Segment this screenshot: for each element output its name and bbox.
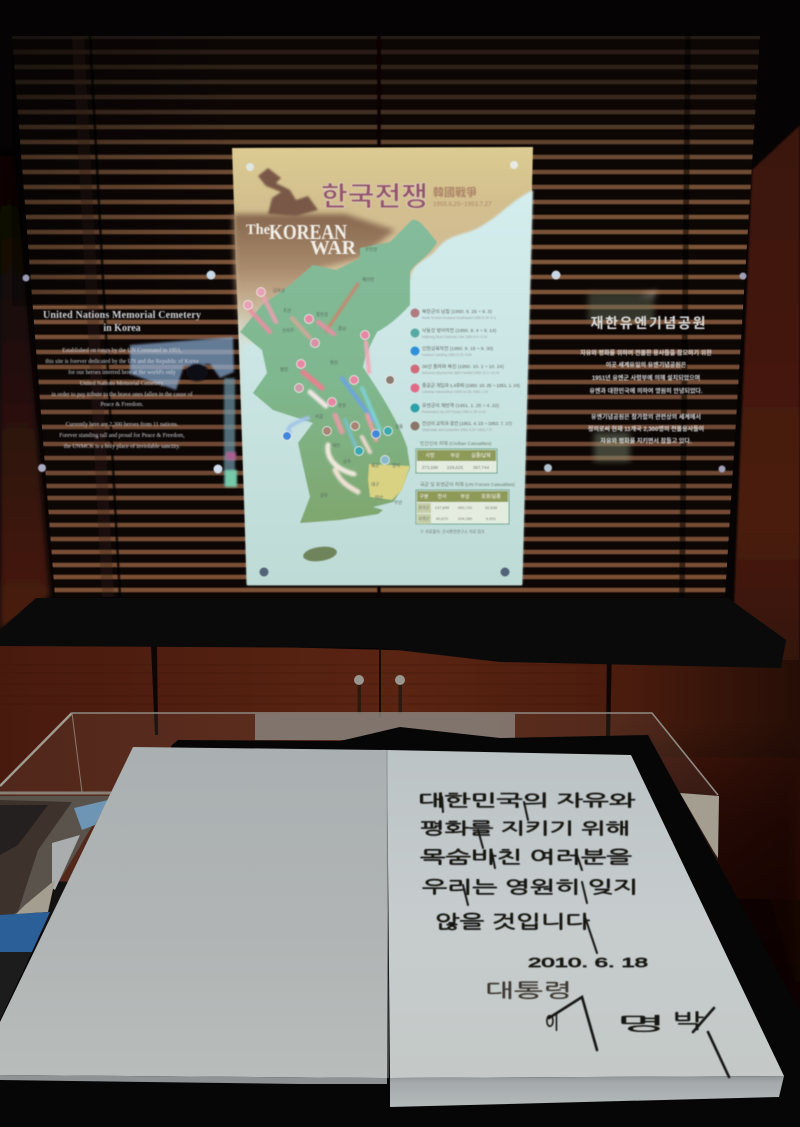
- campaign arrows: [250, 284, 380, 492]
- left plaque text: United Nations Memorial Cemetery: in Korea: [103, 323, 141, 334]
- map place labels: 초산: [283, 307, 291, 313]
- military casualties table: 포로/실종: [481, 493, 501, 500]
- military casualties table: 국군 및 유엔군의 피해 (UN Forces Casualties): [420, 481, 515, 488]
- military casualties table: 전사: [437, 493, 447, 500]
- left plaque text: United Nations Memorial Cemetery: Forever standing tall and proud for Peace & Freedom,: [59, 432, 185, 439]
- map place labels: [273, 246, 403, 506]
- civilian casualties table: 사망: [425, 452, 435, 459]
- cabinet handles: [354, 675, 405, 714]
- reflection on left glass: [130, 337, 237, 487]
- right plaque text: 재한유엔기념공원: 재한유엔기념공원: [590, 315, 706, 331]
- left page edge: [0, 1075, 387, 1084]
- left plaque text: United Nations Memorial Cemetery: [43, 310, 201, 450]
- military casualties table: 32,838: [485, 505, 498, 510]
- left plaque text: United Nations Memorial Cemetery: Peace & Freedom.: [101, 402, 144, 408]
- left plaque text: United Nations Memorial Cemetery: this site is forever dedicated by the UN and the Republic of Korea: [45, 358, 199, 365]
- map place labels: 마산: [375, 494, 383, 501]
- legend: seven campaign phases: 전선의 교착과 휴전 (1951. 4. 23 ~ 1953. 7. 27): [422, 420, 512, 427]
- left plaque text: United Nations Memorial Cemetery: for our heroes interred here at the world's only: [68, 369, 176, 376]
- left wood wall: [0, 150, 50, 630]
- hanja subtitle and dates: 1950.6.25~1953.7.27: [433, 201, 492, 208]
- right plaque text: 재한유엔기념공원: 유엔과 대한민국에 의하여 영원히 안녕되었다.: [589, 387, 703, 395]
- legend: seven campaign phases: 북한군의 남침 (1950. 6. 25 ~ 9. 3): [422, 308, 492, 315]
- military casualties table: 구분: [419, 494, 429, 500]
- legend: seven campaign phases: North Korean Invasion Southward 1950.6.25~9.3: [422, 316, 496, 320]
- civilian casualties table: 민간인의 피해 (Civilian Casualties): [420, 440, 492, 447]
- handwritten message: 대한민국의 자유와: [418, 792, 635, 810]
- map place labels: 원산: [330, 359, 338, 365]
- black shelf: [0, 598, 786, 668]
- civilian casualties table: 실종/납북: [471, 452, 491, 459]
- Korean title: 한국전쟁: [321, 182, 428, 212]
- legend: seven campaign phases: Stalemate and Ceasefire 1951.4.23~1953.7.27: [422, 428, 493, 432]
- handwritten message: [418, 792, 638, 953]
- Jeju island: [302, 545, 338, 563]
- right plaque text: 재한유엔기념공원: 자유와 평화를 지키면서 잠들고 있다.: [600, 437, 692, 445]
- legend: seven campaign phases: Chinese Intervention 1950.10.25~1951.1.24: [422, 390, 488, 394]
- map place labels: 압록강: [273, 287, 285, 294]
- yellow Pusan perimeter: [368, 464, 410, 500]
- handwritten signature: 박: [672, 1011, 704, 1033]
- map place labels: 춘천: [338, 402, 346, 408]
- legend: seven campaign phases: Naktong River Defense Line 1950.9.4~9.14: [422, 335, 487, 339]
- English title: WAR: [310, 237, 357, 259]
- map place labels: 평양: [280, 366, 288, 372]
- right wood wall: [732, 125, 800, 1000]
- English title: KOREAN: [269, 220, 347, 244]
- slatted wood wall: [0, 36, 800, 597]
- items inside case on the left: [0, 796, 110, 1020]
- page gutter: [387, 750, 388, 1078]
- legend: seven campaign phases: Incheon Landing 1950.9.15~9.30: [422, 353, 472, 357]
- right page edge: [390, 1076, 784, 1107]
- arrow badges: [244, 288, 394, 464]
- hanja subtitle and dates: 韓國戰爭: [433, 185, 477, 199]
- guestbook left page: [0, 747, 387, 1078]
- civilian casualties table: [416, 440, 497, 473]
- civilian casualties table: 373,599: [422, 465, 439, 470]
- brown silhouette: [258, 168, 318, 216]
- handwritten message: 않을 것입니다: [435, 912, 590, 932]
- handwritten message: 우리는 영원히 잊지: [422, 878, 638, 897]
- map place labels: 부전강: [365, 246, 377, 253]
- sea area: [242, 190, 533, 585]
- civilian casualties table: 부상: [450, 452, 460, 459]
- military casualties table: 유엔군: [418, 515, 430, 521]
- right plaque text: 재한유엔기념공원: [580, 315, 712, 445]
- glass plaque screws: [22, 270, 746, 474]
- military casualties table: [416, 481, 515, 524]
- brown band under the silhouette: [233, 214, 395, 335]
- handwritten message: 평화를 지키기 위해: [420, 820, 630, 838]
- military casualties table: 137,899: [435, 505, 450, 510]
- legend: seven campaign phases: Restoration by UN Forces 1951.1.25~4.22: [422, 410, 486, 414]
- map place labels: 대구: [371, 481, 379, 488]
- legend: seven campaign phases: 중공군 개입과 1.4후퇴 (1950. 10. 25 ~ 1951. 1. 24): [422, 382, 520, 389]
- left plaque text: United Nations Memorial Cemetery: in order to pay tribute to the brave ones fallen in the cause of: [51, 391, 193, 398]
- legend: seven campaign phases: 38선 돌파와 북진 (1950. 10. 1 ~ 10. 24): [422, 363, 504, 370]
- military casualties table: 450,742: [458, 505, 473, 510]
- map place labels: 상주: [343, 458, 351, 465]
- left plaque text: United Nations Memorial Cemetery: Currently here are 2,300 heroes from 11 nations.: [66, 421, 179, 428]
- poster board: [232, 147, 533, 585]
- map place labels: 흥남: [338, 325, 346, 331]
- map place labels: 왜관: [371, 462, 379, 469]
- right plaque text: 재한유엔기념공원: 이곳 세계유일의 유엔기념공원은: [606, 361, 687, 369]
- clear acrylic display case: [0, 713, 719, 935]
- map place labels: 강릉: [395, 423, 403, 429]
- military casualties table: 104,280: [458, 516, 473, 521]
- legend: seven campaign phases: 유엔군의 재반격 (1951. 1. 25 ~ 4. 22): [422, 402, 499, 409]
- legend: seven campaign phases: 낙동강 방어작전 (1950. 9. 4 ~ 9. 14): [422, 327, 497, 334]
- English title: [246, 220, 357, 259]
- map place labels: 청천강: [316, 311, 328, 317]
- map poster: The Korean War: [232, 147, 533, 585]
- military casualties table: 한국군: [418, 504, 430, 510]
- map place labels: 신의주: [282, 327, 294, 334]
- handwritten signature: 명: [616, 1014, 666, 1034]
- poster screws: [246, 161, 518, 576]
- peninsula map: [240, 220, 437, 523]
- handwritten signature: 이: [545, 1013, 559, 1033]
- map place labels: 부산: [394, 499, 402, 506]
- reflection on right glass: [588, 290, 656, 462]
- military casualties table: 40,670: [436, 516, 449, 521]
- map place labels: 영덕: [392, 462, 400, 469]
- right plaque text: 재한유엔기념공원: 1951년 유엔군 사령부에 의해 설치되었으며: [592, 374, 700, 382]
- handwritten title: 대통령: 대통령: [485, 981, 572, 1002]
- legend: seven campaign phases: Advance beyond the 38th Parallel 1950.10.1~10.24: [422, 371, 499, 375]
- civilian casualties table: 229,625: [447, 465, 464, 470]
- source note: ※ 자료출처: 군사편찬연구소 자료 참조: [420, 528, 485, 534]
- civilian casualties table: 387,744: [473, 465, 490, 470]
- map place labels: 광주: [320, 492, 328, 499]
- map place labels: 혜산진: [362, 276, 374, 283]
- hanja subtitle and dates: [433, 185, 492, 208]
- wooden cabinet doors: [0, 640, 800, 1010]
- handwritten signature: [545, 997, 729, 1077]
- handwritten date: 2010. 6. 18: [528, 955, 648, 970]
- handwritten message: 목숨바친 여러분을: [420, 848, 632, 867]
- guestbook right page: [387, 750, 784, 1078]
- guestbook cover: [0, 727, 800, 1127]
- military casualties table: 부상: [460, 493, 470, 500]
- right plaque text: 재한유엔기념공원: 정의로써 현재 11개국 2,300명의 전몰용사들이: [588, 425, 704, 433]
- legend: seven campaign phases: 인천상륙작전 (1950. 9. 15 ~ 9. 30): [422, 345, 494, 352]
- right plaque text: 재한유엔기념공원: 자유와 평화를 위하여 전몰한 용사들을 참모하기 위한: [580, 349, 712, 357]
- left plaque text: United Nations Memorial Cemetery: United Nations Memorial Cemetery,: [80, 381, 165, 387]
- left plaque text: United Nations Memorial Cemetery: the UNMCK is a holy place of inviolable sanctity.: [64, 443, 181, 450]
- map place labels: 대전: [332, 442, 340, 449]
- left plaque text: United Nations Memorial Cemetery: United Nations Memorial Cemetery: [43, 310, 201, 321]
- right plaque text: 재한유엔기념공원: 유엔기념공원은 참가함의 관련상의 세계에서: [591, 413, 701, 421]
- legend: seven campaign phases: [410, 308, 520, 432]
- military casualties table: 9,931: [486, 516, 497, 521]
- left plaque text: United Nations Memorial Cemetery: Established on tongs by the UN Command in 1951,: [62, 348, 182, 354]
- map place labels: 서울: [315, 413, 323, 420]
- English title: The: [246, 222, 270, 238]
